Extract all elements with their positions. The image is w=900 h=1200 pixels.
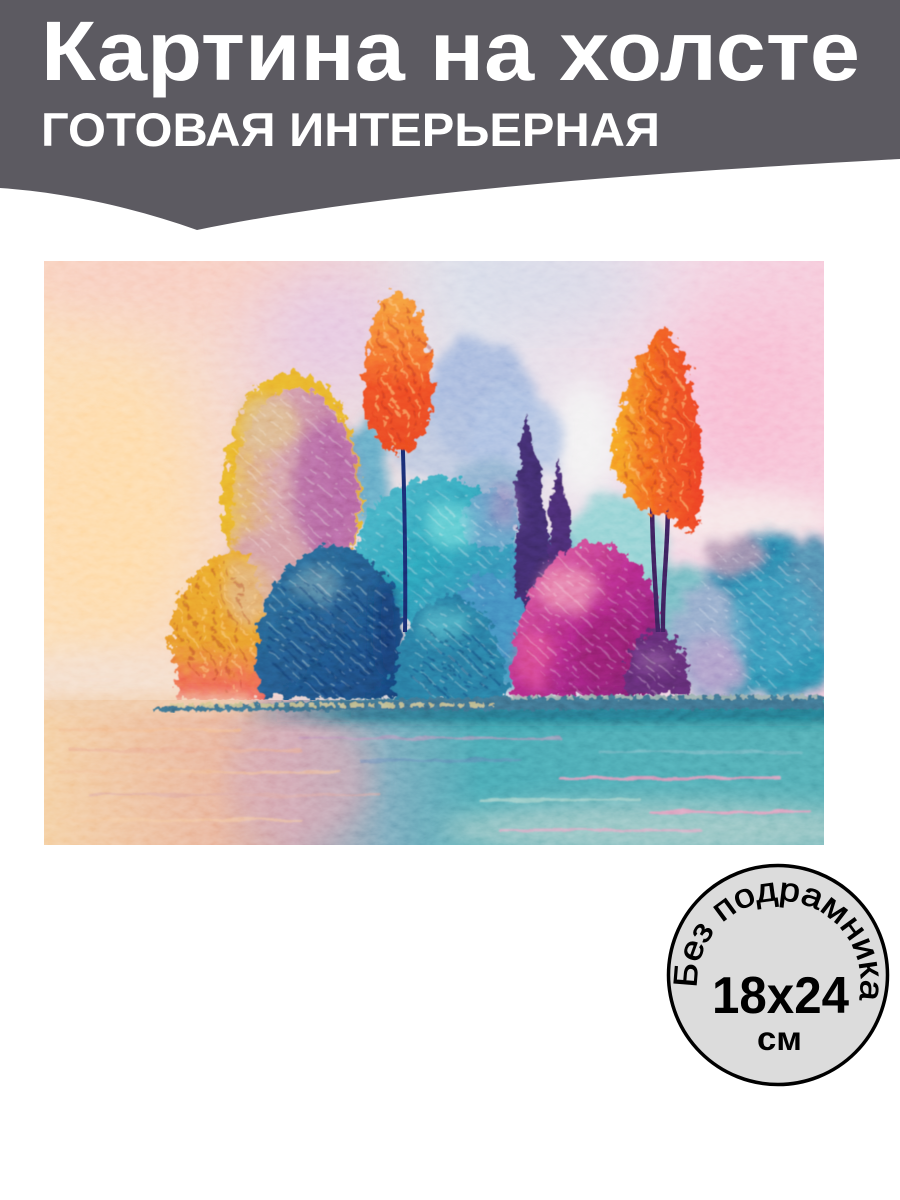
banner shape (0, 0, 900, 230)
title: Картина на холсте (41, 4, 860, 98)
size number: 18x24 (712, 967, 849, 1025)
sky (44, 261, 824, 700)
painting: colourful trees by a lake (44, 261, 824, 845)
dark blue bush (256, 546, 402, 698)
right blue trees (672, 533, 840, 696)
cypress trees (514, 413, 575, 625)
teal middle tree (358, 478, 524, 662)
purple bush (625, 630, 690, 695)
blue mist trees (341, 338, 720, 690)
red tree left (364, 290, 434, 453)
size badge (666, 864, 890, 1086)
red tree right (613, 328, 704, 532)
tree trunks right (652, 470, 668, 632)
pink bush (512, 542, 660, 698)
canvas texture (44, 261, 824, 845)
header banner (0, 0, 900, 230)
shore (152, 695, 824, 711)
unit: см (757, 1020, 802, 1057)
badge circle (668, 866, 888, 1084)
tall gold and pink tree (222, 372, 362, 610)
teal bush (392, 596, 506, 702)
water (44, 695, 880, 858)
subtitle: ГОТОВАЯ ИНТЕРЬЕРНАЯ (41, 103, 660, 156)
lower gold tree (171, 552, 272, 700)
curved label (697, 900, 861, 994)
badge caption: Без подрамника (673, 882, 879, 1000)
tree trunk left (402, 420, 405, 632)
